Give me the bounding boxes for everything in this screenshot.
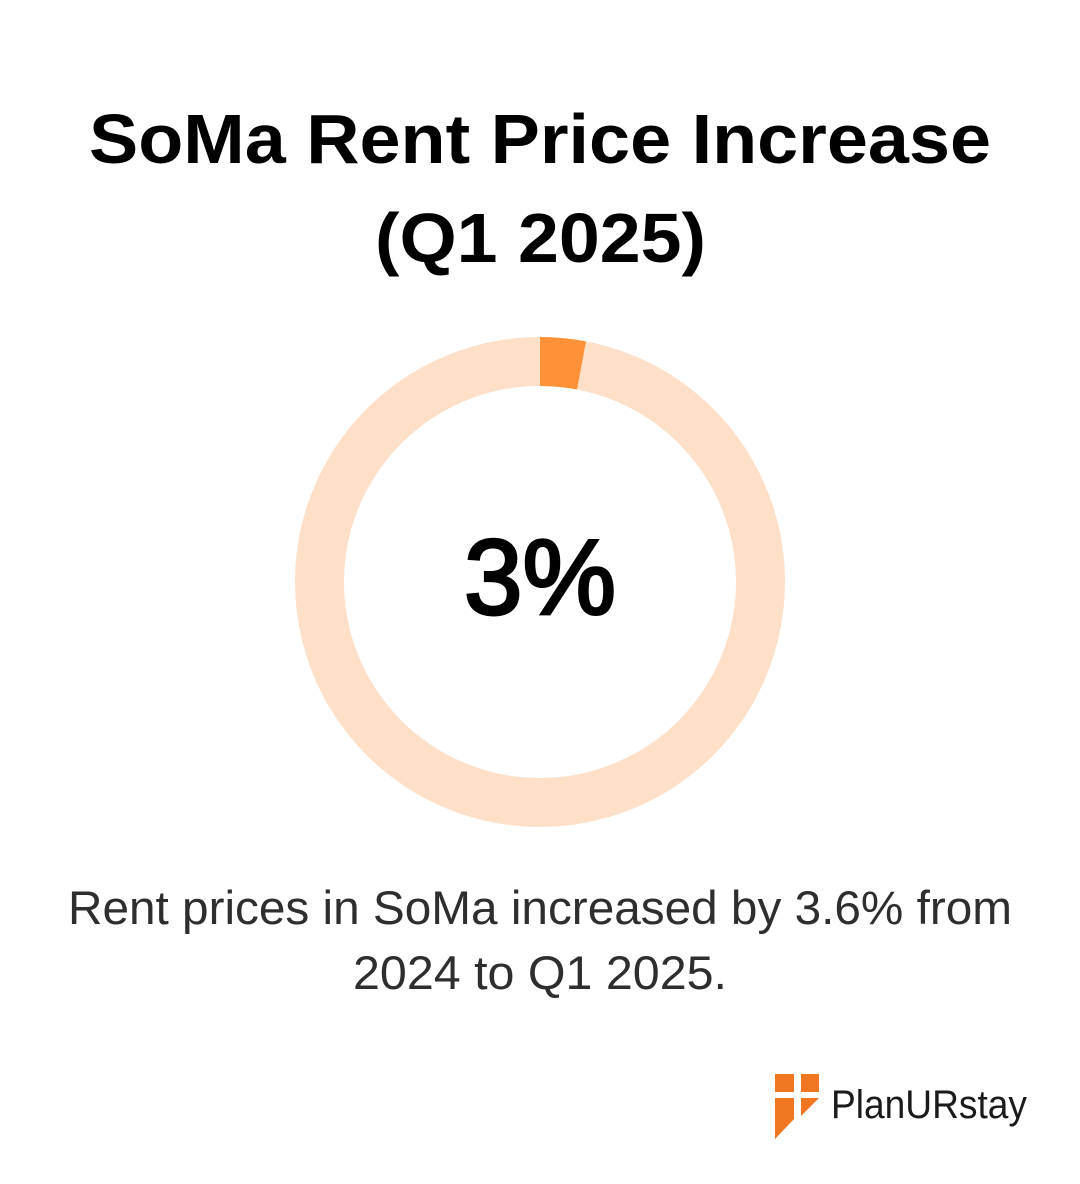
donut center value: 3%: [464, 517, 616, 637]
title: SoMa Rent Price Increase: [89, 100, 991, 178]
description text: [68, 881, 1012, 999]
logo icon: [775, 1074, 819, 1139]
logo: PlanURstay: [775, 1074, 1027, 1139]
logo wordmark: PlanURstay: [831, 1083, 1027, 1127]
title: [89, 100, 991, 277]
description text: 2024 to Q1 2025.: [353, 946, 727, 999]
description text: Rent prices in SoMa increased by 3.6% from: [68, 881, 1012, 934]
title: (Q1 2025): [375, 199, 706, 277]
donut highlighted segment: 3%: [540, 337, 586, 390]
donut chart: [320, 337, 760, 802]
donut track: [320, 362, 760, 802]
